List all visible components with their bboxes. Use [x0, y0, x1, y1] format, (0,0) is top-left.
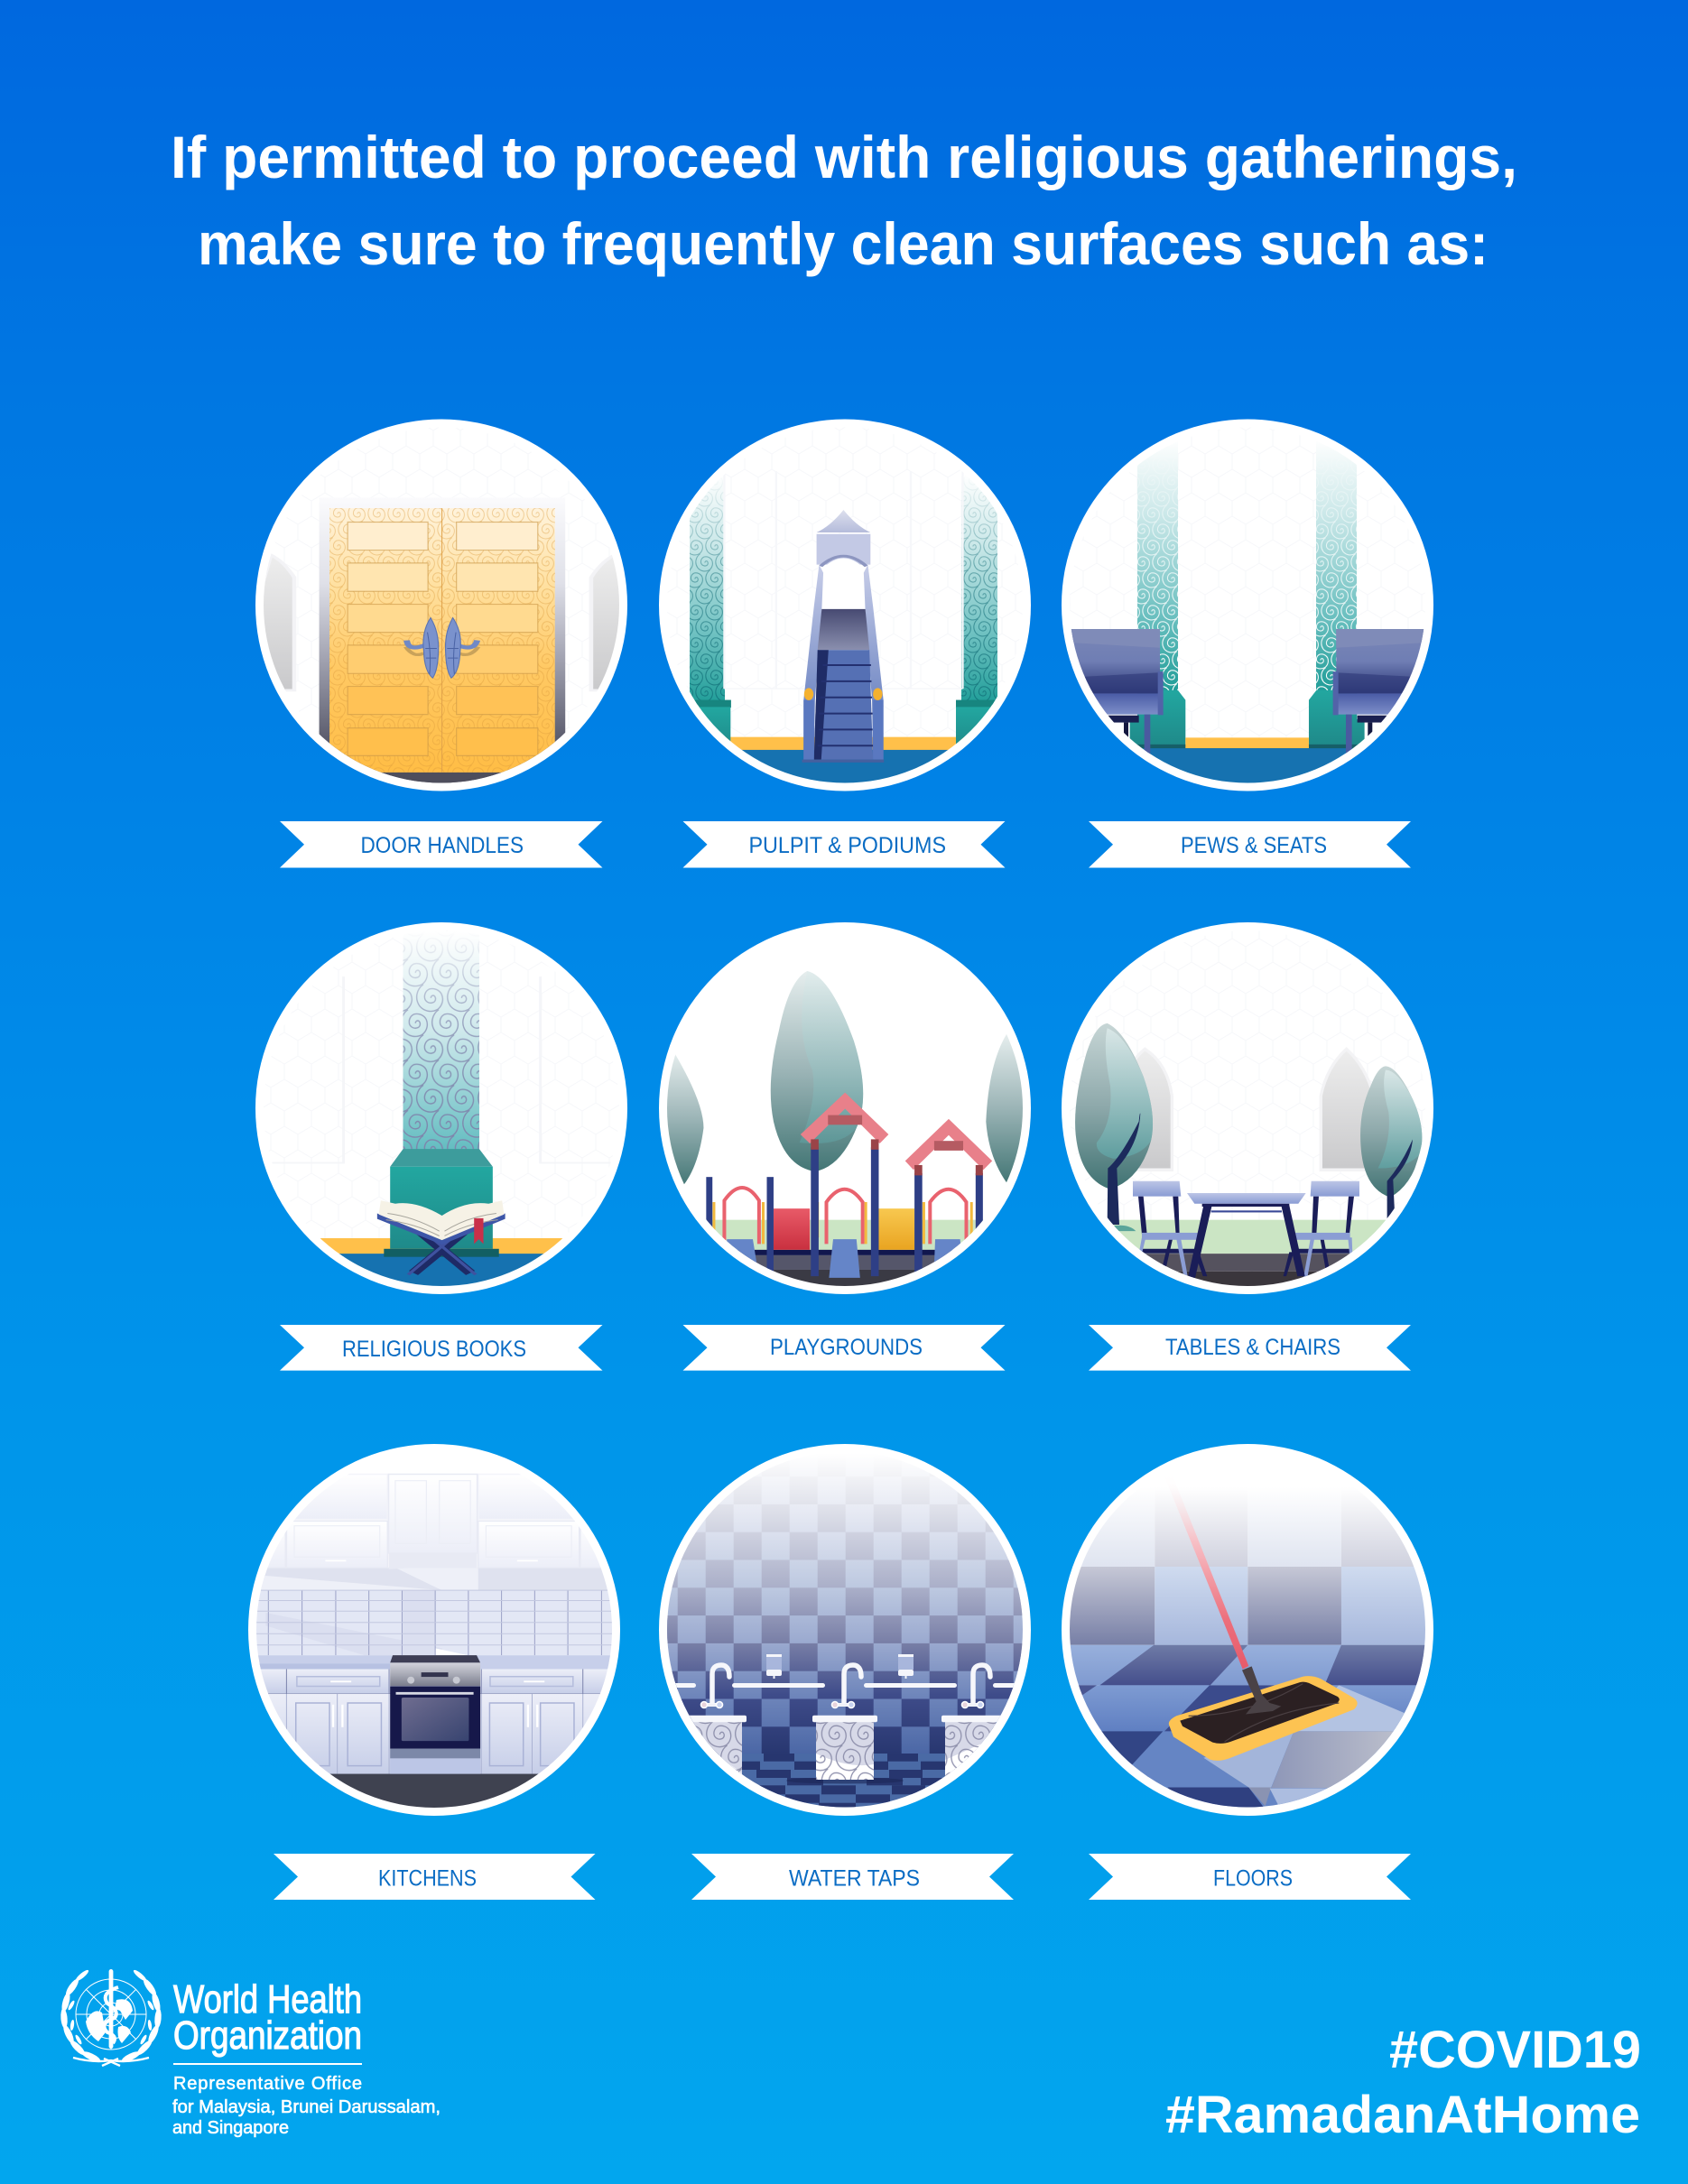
ribbon: door handles: DOOR HANDLES	[361, 833, 524, 858]
WHO logo block: for Malaysia, Brunei Darussalam,	[172, 2097, 441, 2117]
panel: pulpit and podiums	[649, 419, 1031, 791]
title: make sure to frequently clean surfaces such as:	[198, 210, 1489, 277]
WHO logo block: and Singapore	[172, 2118, 289, 2138]
ribbon: floors	[1089, 1854, 1411, 1900]
ribbon: pews and seats	[1089, 821, 1411, 868]
ribbon: door handles	[280, 821, 603, 868]
icon: pews	[1070, 629, 1426, 791]
ribbon: religious books	[280, 1325, 603, 1371]
ribbon: pulpit and podiums	[682, 821, 1006, 868]
ribbon: water taps	[691, 1854, 1014, 1900]
panel: floors	[1056, 1444, 1447, 1828]
WHO logo block: Organization	[173, 2013, 362, 2058]
icon: pedestals, taps and dispensers	[675, 1654, 1015, 1780]
icon: tiled floor and mop	[1070, 1493, 1425, 1807]
panel: religious books	[255, 921, 627, 1294]
title	[171, 124, 1517, 277]
title: If permitted to proceed with religious gatherings,	[171, 124, 1517, 190]
floor tiles	[719, 1754, 972, 1807]
hashtags	[1165, 2021, 1641, 2144]
ribbon: religious books: RELIGIOUS BOOKS	[342, 1337, 526, 1362]
ribbon: playgrounds: PLAYGROUNDS	[770, 1335, 923, 1360]
icon: open book on stand	[265, 976, 618, 1292]
icon: courtyard table, chairs and trees	[1075, 1023, 1423, 1286]
ribbon: kitchens	[274, 1854, 596, 1900]
icon: kitchen with oven	[256, 1473, 612, 1808]
ribbon: pulpit and podiums: PULPIT & PODIUMS	[749, 833, 946, 858]
panel: tables and chairs	[1062, 921, 1444, 1294]
ribbon: tables and chairs: TABLES & CHAIRS	[1165, 1335, 1340, 1360]
icon: WHO emblem	[60, 1968, 162, 2066]
panel: water taps	[659, 1444, 1031, 1817]
panel: door handles	[255, 419, 627, 791]
panel: kitchens	[235, 1444, 628, 1822]
icon: trees and play structure	[649, 971, 1027, 1292]
WHO logo block: World Health	[173, 1977, 362, 2022]
hashtags: #RamadanAtHome	[1165, 2086, 1640, 2144]
WHO logo block: Representative Office	[173, 2074, 362, 2094]
hashtags: #COVID19	[1389, 2021, 1641, 2079]
ribbon: water taps: WATER TAPS	[789, 1866, 920, 1892]
ribbon: floors: FLOORS	[1213, 1866, 1293, 1892]
ribbon: tables and chairs	[1089, 1325, 1411, 1371]
panel: pews and seats	[1062, 419, 1433, 791]
ribbon: pews and seats: PEWS & SEATS	[1181, 833, 1327, 858]
WHO logo block	[60, 1968, 441, 2138]
ribbon: playgrounds	[682, 1325, 1006, 1371]
icon: door panels and handles	[348, 508, 538, 773]
icon: pulpit staircase	[694, 471, 996, 783]
ribbon: kitchens: KITCHENS	[378, 1866, 477, 1892]
panel: playgrounds	[649, 922, 1031, 1294]
